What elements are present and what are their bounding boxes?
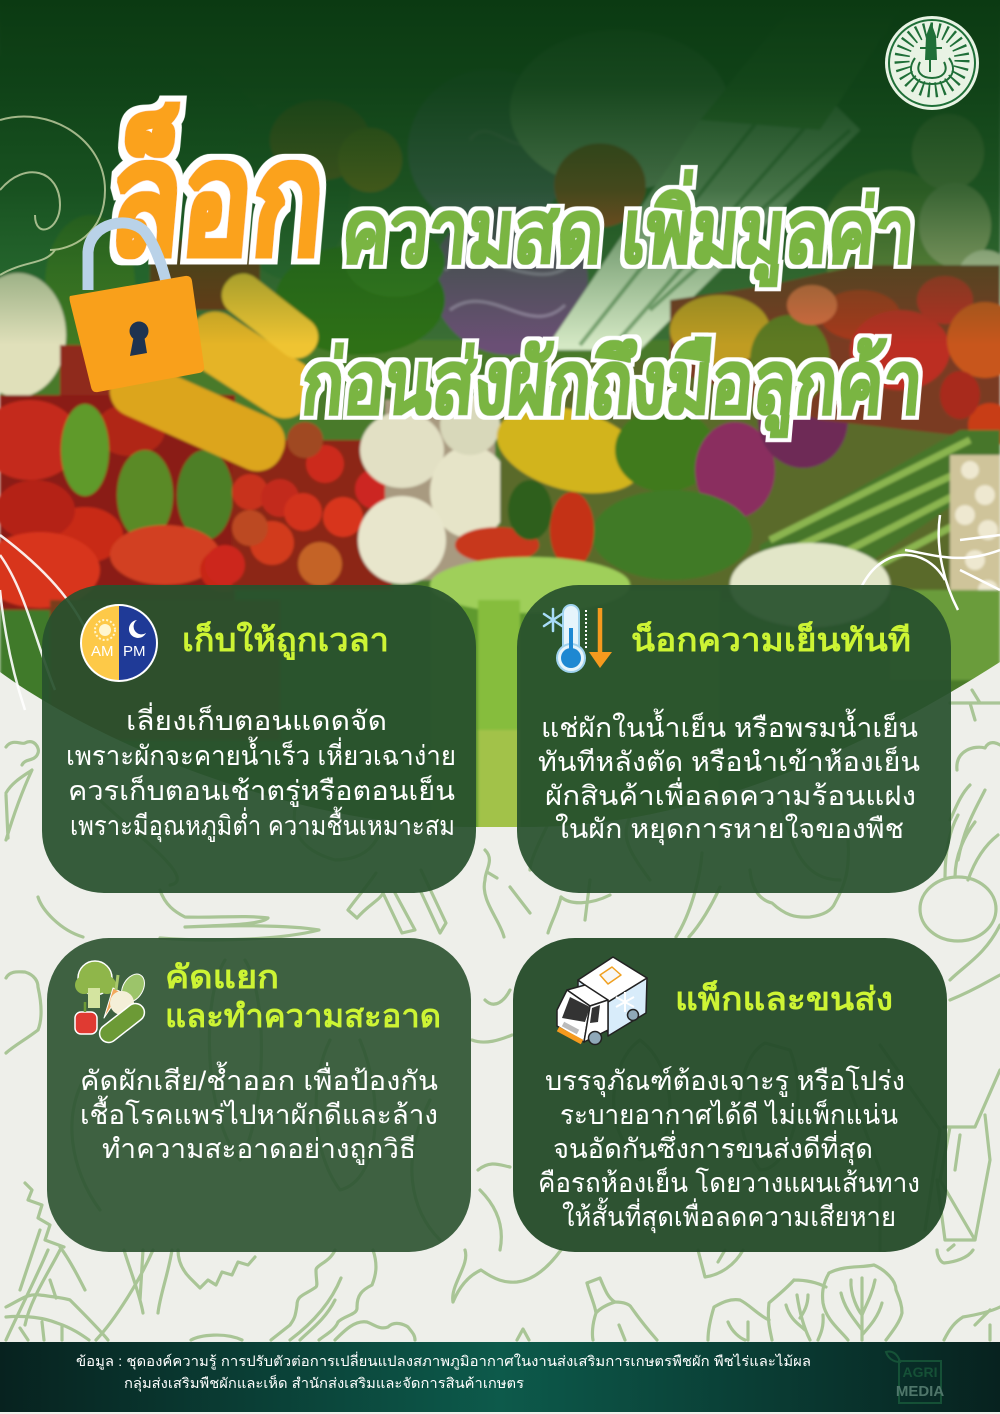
text block: เพราะมีอุณหภูมิต่ำ ความชื้นเหมาะสม bbox=[70, 806, 455, 843]
source text bbox=[76, 1352, 811, 1392]
heading: แพ็กและขนส่ง bbox=[675, 979, 893, 1017]
text block: ควรเก็บตอนเช้าตรู่หรือตอนเย็น bbox=[68, 773, 455, 807]
cabbage bbox=[730, 543, 890, 627]
text block bbox=[66, 702, 456, 843]
text block: แช่ผักในน้ำเย็น หรือพรมน้ำเย็น bbox=[541, 708, 918, 743]
green beans bbox=[760, 428, 1000, 558]
title word: lock: ล็อก bbox=[103, 102, 333, 288]
icon: vegetables bbox=[75, 961, 149, 1046]
text block: ผักสินค้าเพื่อลดความร้อนแฝง bbox=[545, 777, 916, 811]
text block: เลี่ยงเก็บตอนแดดจัด bbox=[126, 702, 387, 736]
background photo of vegetables bbox=[0, 0, 1000, 840]
decorative white doodle: left swirl bbox=[0, 116, 105, 275]
peppers and strawberries bbox=[670, 265, 1000, 440]
text block: บรรจุภัณฑ์ต้องเจาะรู หรือโปร่ง bbox=[545, 1065, 905, 1098]
icon: thermometer with arrow bbox=[544, 605, 612, 672]
heading: น็อกความเย็นทันที bbox=[631, 620, 911, 658]
text block: ในผัก หยุดการหายใจของพืช bbox=[555, 813, 904, 846]
decorative white doodle: right plant bbox=[860, 515, 1000, 610]
heading: และทำความสะอาด bbox=[165, 998, 441, 1034]
text block: ทันทีหลังตัด หรือนำเข้าห้องเย็น bbox=[538, 744, 920, 777]
panel: cool immediately bbox=[517, 585, 951, 893]
icon: padlock bbox=[70, 223, 204, 392]
heading: เก็บให้ถูกเวลา bbox=[182, 620, 389, 661]
icon: AM PM clock bbox=[80, 604, 158, 682]
heading bbox=[165, 959, 441, 1034]
text block bbox=[538, 708, 920, 846]
title bbox=[103, 102, 927, 438]
peppers left bbox=[0, 395, 235, 625]
text block: คือรถห้องเย็น โดยวางแผนเส้นทาง bbox=[538, 1165, 920, 1198]
icon: AM PM clock: AM bbox=[91, 643, 114, 660]
panel: sort and clean bbox=[47, 938, 471, 1252]
text block: ระบายอากาศได้ดี ไม่แพ็กแน่น bbox=[560, 1097, 898, 1130]
text block: ให้สั้นที่สุดเพื่อลดความเสียหาย bbox=[562, 1197, 896, 1234]
text block bbox=[80, 1061, 438, 1165]
top dark overlay bbox=[0, 0, 1000, 345]
upper area bbox=[196, 248, 998, 340]
icon: refrigerated truck bbox=[557, 957, 647, 1044]
logo: Agri Media bbox=[886, 1351, 944, 1403]
icon: AM PM clock: PM bbox=[123, 643, 146, 660]
source text: ข้อมูล : ชุดองค์ความรู้ การปรับตัวต่อการเปลี่ยนแปลงสภาพภูมิอากาศในงานส่งเสริมการเกษตรพืชผัก พืชไร่และไม้ผล bbox=[76, 1352, 811, 1370]
logo: Agri Media: MEDIA bbox=[896, 1383, 944, 1400]
text block: คัดผักเสีย/ช้ำออก เพื่อป้องกัน bbox=[80, 1061, 438, 1096]
footer bbox=[0, 1342, 1000, 1412]
text block: เพราะผักจะคายน้ำเร็ว เหี่ยวเฉาง่าย bbox=[66, 736, 456, 771]
garlic bbox=[950, 455, 1000, 605]
panel: pack and transport bbox=[513, 938, 947, 1252]
vegetable line pattern bbox=[6, 690, 1000, 1340]
text block bbox=[538, 1065, 920, 1234]
source text: กลุ่มส่งเสริมพืชผักและเห็ด สำนักส่งเสริมและจัดการสินค้าเกษตร bbox=[124, 1374, 524, 1392]
panel: harvest at the right time bbox=[42, 585, 476, 893]
text block: ทำความสะอาดอย่างถูกวิธี bbox=[102, 1134, 416, 1165]
right mid area bbox=[498, 360, 950, 590]
logo: Agri Media: AGRI bbox=[902, 1364, 938, 1380]
text block: จนอัดกันซึ่งการขนส่งดีที่สุด bbox=[553, 1130, 873, 1166]
cherry tomatoes bbox=[232, 440, 392, 590]
decorative white doodle: left lower lines bbox=[0, 535, 90, 710]
lettuce bbox=[460, 604, 527, 827]
text block: เชื้อโรคแพร่ไปหาผักดีและล้าง bbox=[80, 1095, 438, 1130]
white onions bbox=[385, 400, 495, 580]
corn bbox=[108, 272, 320, 474]
heading: คัดแยก bbox=[165, 959, 279, 995]
logo: department seal bbox=[885, 16, 979, 110]
